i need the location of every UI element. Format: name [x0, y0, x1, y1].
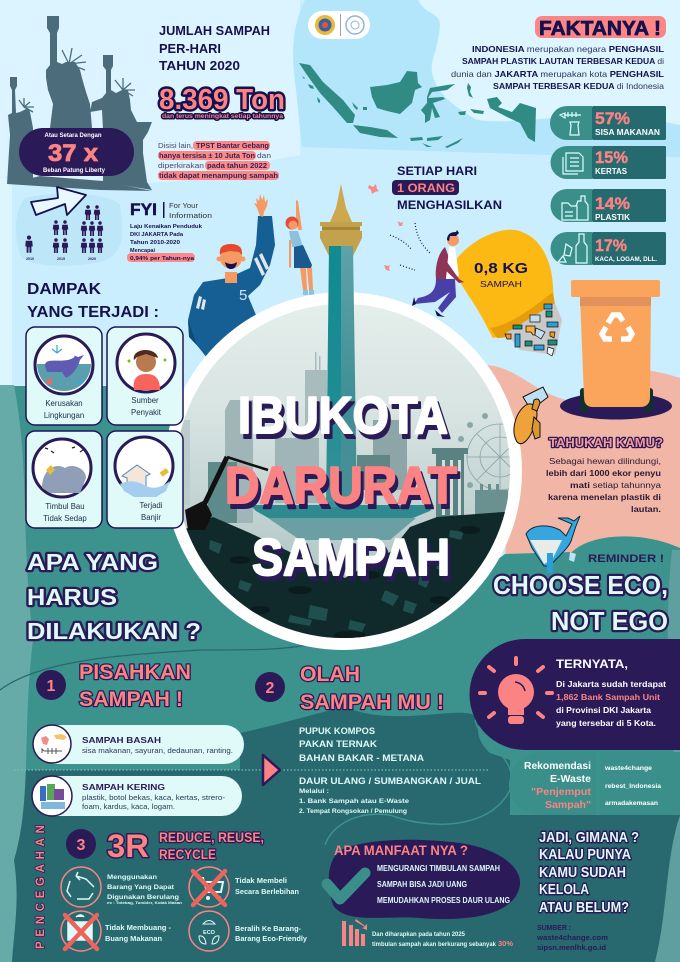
- title: Ibukota Darurat Sampah: [225, 387, 460, 592]
- panel: rekomendasi e-waste: armadakemasan: [605, 800, 658, 807]
- arrow: to step 2: [263, 755, 280, 785]
- panel: apa manfaat nya: MENGURANGI TIMBULAN SAMPAH: [377, 864, 500, 873]
- text block: tahukah kamu: lautan.: [631, 505, 661, 514]
- heading: jumlah sampah: TAHUN 2020: [159, 58, 240, 73]
- illustration: Monas tower: [320, 184, 362, 507]
- panel: apa manfaat nya: SAMPAH BISA JADI UANG: [377, 880, 467, 889]
- text: menggunakan barang: Barang Yang Dapat: [107, 884, 175, 891]
- illustration: man in blue jersey: 5: [239, 287, 247, 304]
- text block: FYI: Tahun 2010-2020: [130, 240, 180, 246]
- text: jadi gimana: KALAU PUNYA: [539, 846, 631, 863]
- chart: population people icons: 2015: [57, 257, 65, 261]
- step 1: PISAHKAN: [79, 661, 191, 684]
- text block: fakta: SAMPAH PLASTIK LAUTAN TERBESAR KEDUA di: [462, 57, 664, 66]
- pill: sampah kering: foam, kardus, kaca, logam.: [82, 802, 175, 811]
- step 2: 2: [266, 680, 275, 697]
- text: jadi gimana: JADI, GIMANA ?: [539, 829, 639, 846]
- callout: 37x Liberty: [19, 128, 134, 176]
- icon: eco: ECO: [203, 930, 216, 936]
- illustration: spilled plastic trash: [505, 303, 562, 356]
- text block: tahukah kamu: Sebagai hewan dilindungi,: [549, 457, 661, 466]
- title: Ibukota Darurat Sampah: IBUKOTA: [238, 387, 448, 445]
- text block: TPST Bantar Gebang: hanya tersisa ± 10 Juta Ton: [159, 151, 255, 160]
- chart: population people icons: 2020: [88, 257, 96, 261]
- text: reminder: CHOOSE ECO,: [493, 570, 668, 600]
- chart: population people icons: 2010: [26, 257, 34, 261]
- text block: fakta: [451, 45, 664, 91]
- heading: apa yang harus dilakukan: HARUS: [27, 584, 117, 610]
- stat card: 14%: 14%: [595, 194, 630, 213]
- text: reminder: NOT EGO: [551, 606, 668, 636]
- text block: FYI: Information: [169, 213, 212, 220]
- illustration: turtle with plastic: [514, 387, 548, 444]
- title: Ibukota Darurat Sampah: DARURAT: [225, 457, 457, 515]
- text block: fakta: SAMPAH TERBESAR KEDUA di Indonesia: [493, 82, 664, 91]
- panel: terjadi banjir: Banjir: [141, 513, 161, 522]
- text block: olah sampah: DAUR ULANG / SUMBANGKAN / JUAL: [299, 776, 481, 787]
- step 2: OLAH: [300, 663, 360, 686]
- panel: kerusakan lingkungan: [26, 327, 102, 425]
- icon: no shopping cart: [189, 867, 229, 907]
- text: menggunakan barang: [107, 874, 182, 905]
- icon: declining bars: [342, 919, 367, 946]
- text: reminder: REMINDER !: [588, 553, 664, 565]
- pill: sampah kering: plastik, botol bekas, kaca, kertas, strero-: [82, 793, 226, 802]
- chart: population people icons: [16, 187, 122, 266]
- panel: terjadi banjir: [107, 431, 183, 528]
- vertical label: pencegahan: PENCEGAHAN: [35, 825, 47, 949]
- title: Ibukota Darurat Sampah: DARURAT: [228, 462, 460, 520]
- illustration: yellow trash bag: 0,8 KG: [474, 260, 528, 277]
- illustration: yellow trash bag: [452, 230, 555, 338]
- text block: setiap hari: 1 ORANG: [397, 181, 455, 195]
- logos: [308, 11, 370, 39]
- illustration: yellow trash bag: SAMPAH: [480, 279, 522, 289]
- map: Indonesia: [299, 63, 536, 148]
- text: jadi gimana: [539, 829, 639, 916]
- illustration: woman: [286, 200, 314, 295]
- panel: rekomendasi e-waste: [509, 752, 680, 815]
- panel: rekomendasi e-waste: Sampah": [545, 799, 591, 811]
- icon: eco: [189, 911, 229, 951]
- text block: TPST Bantar Gebang: tidak dapat menampung sampah: [159, 171, 278, 180]
- step 2: SAMPAH MU !: [300, 691, 444, 714]
- pill: sampah basah: [33, 725, 244, 764]
- text block: FYI: FYI: [130, 200, 157, 219]
- step 2: [255, 663, 444, 714]
- callout: 37x Liberty: Atau Setara Dengan: [44, 133, 102, 139]
- panel: timbul bau: [26, 431, 102, 528]
- text block: setiap hari: SETIAP HARI: [397, 164, 477, 178]
- stat card: 17%: 17%: [595, 236, 627, 255]
- step 3: 3R: 3R: [107, 828, 149, 864]
- text block: tahukah kamu: [546, 436, 663, 514]
- text block: olah sampah: PUPUK KOMPOS: [299, 726, 375, 736]
- stat: 8.369 Ton: dan terus meningkat setiap tahunnya: [162, 113, 283, 120]
- text: target 2025: [372, 932, 513, 948]
- heading: jumlah sampah: PER-HARI: [159, 41, 221, 56]
- panel: timbul bau: Tidak Sedap: [43, 514, 87, 523]
- panel: apa manfaat nya: APA MANFAAT NYA ?: [334, 843, 468, 858]
- text: jadi gimana: KAMU SUDAH: [539, 864, 626, 881]
- text: sumber: sipsn.menlhk.go.id: [537, 943, 606, 952]
- stat card: 15%: 15%: [595, 148, 628, 167]
- text block: TPST Bantar Gebang: TPST Bantar Gebang: [196, 141, 269, 150]
- step 1: 1: [47, 678, 56, 695]
- panel: ternyata: TERNYATA,: [556, 659, 628, 671]
- text: target 2025: Dan diharapkan pada tahun 2025: [372, 932, 466, 938]
- text block: TPST Bantar Gebang: Disisi lain,: [158, 141, 193, 150]
- text: reminder: [493, 553, 668, 636]
- text: beralih: [235, 924, 307, 943]
- step 3: 3R: RECYCLE: [159, 847, 216, 862]
- text block: olah sampah: PAKAN TERNAK: [299, 739, 378, 749]
- main circle: city scene: [164, 292, 533, 650]
- step 3: 3R: 3: [77, 837, 86, 854]
- text: sumber: SUMBER :: [537, 923, 571, 932]
- text block: olah sampah: BAHAN BAKAR - METANA: [299, 753, 425, 763]
- text: menggunakan barang: Digunakan Berulang: [107, 894, 179, 901]
- text: jadi gimana: ATAU BELUM?: [539, 899, 629, 916]
- callout: 37x Liberty: Beban Patung Liberty: [43, 168, 106, 174]
- heading: jumlah sampah: JUMLAH SAMPAH: [159, 23, 270, 38]
- illustration: Liberty statues: [7, 16, 152, 191]
- text block: olah sampah: Melalui :: [299, 788, 329, 795]
- panel: ternyata: yang tersebar di 5 Kota.: [556, 718, 656, 728]
- text: tidak membeli: [235, 876, 299, 896]
- panel: sumber penyakit: [107, 327, 183, 425]
- text: beralih: Barang Eco-Friendly: [235, 934, 307, 943]
- panel: ternyata: di Provinsi DKI Jakarta: [556, 705, 651, 715]
- pill: sampah kering: [32, 776, 242, 816]
- panel: rekomendasi e-waste: E-Waste: [550, 773, 591, 785]
- panel: rekomendasi e-waste: waste4change: [604, 765, 652, 772]
- step 1: SAMPAH !: [79, 688, 183, 711]
- panel: sumber penyakit: Penyakit: [131, 408, 162, 417]
- panel: timbul bau: Timbul Bau: [45, 502, 85, 511]
- text block: FYI: Mencapai: [130, 248, 155, 254]
- text block: FYI: DKI JAKARTA Pada: [130, 232, 184, 238]
- panel: sumber penyakit: Sumber: [131, 396, 159, 405]
- text block: tahukah kamu: lebih dari 1000 ekor penyu: [546, 469, 661, 478]
- panel: ternyata: Di Jakarta sudah terdapat: [556, 679, 666, 689]
- text block: fakta: INDONESIA merupakan negara PENGHASIL: [472, 45, 664, 54]
- text block: setiap hari: MENGHASILKAN: [397, 198, 502, 212]
- text: tidak membuang: Buang Makanan: [105, 934, 162, 943]
- text block: TPST Bantar Gebang: [158, 141, 279, 180]
- heading: apa yang harus dilakukan: APA YANG: [27, 549, 158, 575]
- stat card: 15%: KERTAS: [595, 167, 628, 176]
- heading: dampak: YANG TERJADI :: [27, 304, 159, 321]
- text block: FYI: 0,94% per Tahun-nya: [130, 256, 195, 262]
- text block: olah sampah: [299, 726, 481, 815]
- arrow: [31, 187, 86, 215]
- panel: kerusakan lingkungan: Lingkungan: [44, 411, 84, 420]
- text: target 2025: 30%: [498, 939, 513, 948]
- icon: check mark: [327, 873, 365, 899]
- text: tidak membeli: Tidak Membeli: [235, 876, 287, 885]
- panel: ternyata: [470, 639, 680, 750]
- text block: FYI: Laju Kenaikan Penduduk: [130, 224, 203, 230]
- stat card: 14%: PLASTIK: [595, 213, 630, 222]
- text block: TPST Bantar Gebang: pada tahun 2022: [207, 161, 267, 170]
- illustration: runner man carrying bag: [412, 230, 464, 317]
- icon: reuse arrows: [61, 867, 101, 907]
- stat card: 17%: KACA, LOGAM, DLL.: [595, 256, 657, 263]
- stat card: 14%: [550, 189, 666, 222]
- text block: TPST Bantar Gebang: dan: [257, 151, 271, 160]
- heading: Faktanya: FAKTANYA !: [539, 18, 661, 40]
- stat card: 15%: [550, 146, 666, 179]
- text block: setiap hari: [368, 164, 502, 271]
- illustration: orange recycle bin: [560, 280, 672, 420]
- text block: tahukah kamu: mati setiap tahunnya: [570, 481, 662, 490]
- stat card: 57%: 57%: [595, 109, 630, 128]
- text block: TPST Bantar Gebang: diperkirakan: [158, 161, 204, 170]
- text block: tahukah kamu: karena menelan plastik di: [548, 493, 661, 502]
- panel: rekomendasi e-waste: "Penjemput: [531, 786, 592, 798]
- heading: apa yang harus dilakukan: [27, 549, 201, 644]
- text block: FYI: [127, 200, 212, 262]
- text: menggunakan barang: Menggunakan: [107, 874, 157, 881]
- icon: no food waste: [61, 911, 101, 951]
- step 3: 3R: [66, 828, 264, 864]
- panel: terjadi banjir: Terjadi: [140, 501, 163, 510]
- text block: FYI: For Your: [169, 203, 199, 210]
- illustration: man in blue jersey: [188, 194, 275, 358]
- panel: apa manfaat nya: MEMUDAHKAN PROSES DAUR ULANG: [377, 896, 510, 905]
- panel: ternyata: 1,862 Bank Sampah Unit: [556, 692, 660, 702]
- stat: 8.369 Ton: 8.369 Ton: [159, 84, 285, 116]
- pill: sampah basah: SAMPAH BASAH: [82, 735, 161, 745]
- text: beralih: Beralih Ke Barang-: [235, 924, 302, 933]
- text block: olah sampah: 1. Bank Sampah atau E-Waste: [299, 798, 409, 805]
- title: Ibukota Darurat Sampah: SAMPAH: [252, 529, 450, 587]
- heading: dampak: [27, 281, 159, 321]
- text: sumber: waste4change.com: [536, 933, 608, 942]
- text block: tahukah kamu: TAHUKAH KAMU?: [549, 436, 663, 450]
- heading: jumlah sampah: [159, 23, 270, 73]
- icon: light bulb: [480, 658, 552, 724]
- pill: sampah basah: sisa makanan, sayuran, dedaunan, ranting.: [82, 746, 233, 755]
- callout: 37x Liberty: 37 x: [48, 140, 99, 167]
- text: target 2025: timbulan sampah akan berkurang sebanyak: [372, 942, 497, 948]
- step 1: [36, 661, 191, 711]
- text: jadi gimana: KELOLA: [539, 881, 589, 898]
- stat card: 57%: [550, 106, 666, 140]
- pill: sampah kering: SAMPAH KERING: [82, 782, 165, 792]
- illustration: whale with trash: [526, 516, 580, 573]
- title: Ibukota Darurat Sampah: SAMPAH: [255, 534, 453, 592]
- title: Ibukota Darurat Sampah: IBUKOTA: [241, 392, 451, 450]
- text: sumber: [536, 923, 608, 952]
- text: tidak membuang: [105, 923, 172, 943]
- panel: rekomendasi e-waste: rebest_Indonesia: [605, 783, 661, 790]
- heading: apa yang harus dilakukan: DILAKUKAN ?: [27, 618, 201, 644]
- heading: dampak: DAMPAK: [27, 281, 101, 298]
- step 3: 3R: REDUCE, REUSE,: [159, 830, 264, 845]
- panel: kerusakan lingkungan: Kerusakan: [45, 399, 83, 408]
- text block: fakta: dunia dan JAKARTA merupakan kota PENGHASIL: [451, 70, 664, 79]
- text: tidak membuang: Tidak Membuang -: [105, 923, 172, 932]
- panel: apa manfaat nya: [327, 840, 520, 919]
- stat card: 17%: [550, 232, 666, 265]
- icon: recycle: [602, 315, 632, 339]
- text block: olah sampah: 2. Tempat Rongsokan / Pemulung: [299, 808, 407, 815]
- text: tidak membeli: Secara Berlebihan: [235, 887, 299, 896]
- stat card: 57%: SISA MAKANAN: [595, 128, 660, 137]
- text: menggunakan barang: ex : Totebag, Tumbler, Kotak Makan: [107, 901, 182, 905]
- panel: rekomendasi e-waste: Rekomendasi: [524, 760, 591, 772]
